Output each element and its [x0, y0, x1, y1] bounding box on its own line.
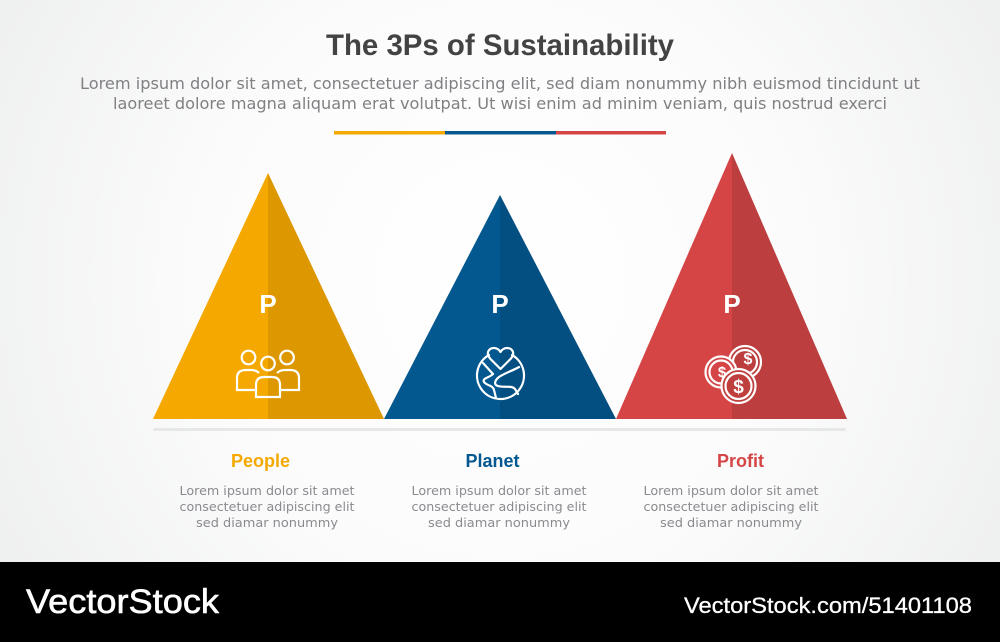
panel: people triangle [153, 173, 384, 419]
profit letter: P [723, 289, 741, 319]
intro text: laoreet dolore magna aliquam erat volutpat. Ut wisi enim ad minim veniam, quis nostrud exerci [113, 94, 887, 113]
people caption: Lorem ipsum dolor sit amet [180, 484, 355, 498]
planet caption: Planet [465, 451, 520, 471]
icon: coins: $ [744, 351, 753, 368]
planet letter: P [491, 289, 509, 319]
profit caption: sed diamar nonummy [660, 516, 802, 530]
people caption [180, 451, 355, 530]
watermark logo: VectorStock [26, 583, 220, 621]
people caption: People [231, 451, 290, 471]
watermark bar [0, 562, 1000, 642]
people letter: P [259, 289, 277, 319]
intro text [80, 74, 920, 113]
panel: profit triangle [616, 153, 847, 419]
watermark url: VectorStock.com/51401108 [684, 593, 972, 618]
planet caption [412, 451, 587, 530]
planet caption: consectetuer adipiscing elit [412, 500, 587, 514]
planet caption: sed diamar nonummy [428, 516, 570, 530]
icon: coins: $ [718, 364, 727, 381]
profit caption: consectetuer adipiscing elit [644, 500, 819, 514]
icon: coins [706, 346, 761, 403]
people caption: consectetuer adipiscing elit [180, 500, 355, 514]
baseline shadow [153, 428, 846, 431]
title: The 3Ps of Sustainability [326, 29, 674, 62]
icon: planet with heart [477, 348, 524, 399]
people caption: sed diamar nonummy [196, 516, 338, 530]
planet caption: Lorem ipsum dolor sit amet [412, 484, 587, 498]
profit caption: Profit [717, 451, 764, 471]
panel: planet triangle [384, 195, 616, 419]
icon: people [237, 351, 299, 397]
icon: coins: $ [733, 377, 744, 398]
profit caption: Lorem ipsum dolor sit amet [644, 484, 819, 498]
tri-colour divider [334, 131, 666, 134]
intro text: Lorem ipsum dolor sit amet, consectetuer adipiscing elit, sed diam nonummy nibh euismod tincidunt ut [80, 74, 920, 93]
profit caption [644, 451, 819, 530]
